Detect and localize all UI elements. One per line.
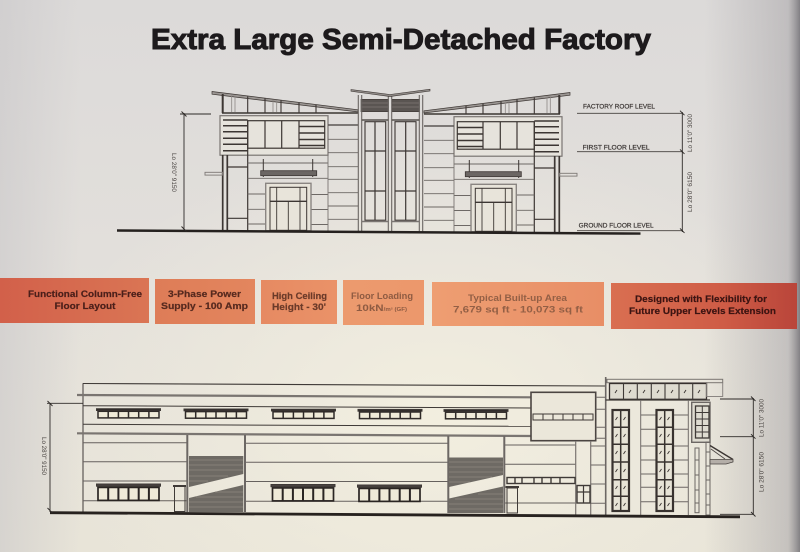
central tower of front elevation	[351, 89, 430, 232]
level labels: FACTORY ROOF LEVEL	[583, 104, 655, 110]
small doors	[173, 486, 519, 513]
feature bar: built-up area: 7,679 sq ft - 10,073 sq ft	[453, 304, 584, 316]
feature bar: power supply: Supply - 100 Amp	[161, 301, 248, 312]
feature bar: column-free layout: Functional Column-Free	[28, 289, 142, 300]
right dimension line	[680, 111, 684, 233]
lower window row	[96, 484, 422, 501]
level labels: GROUND FLOOR LEVEL	[579, 222, 654, 230]
front dimension labels: Lo 11'0" 3000	[688, 113, 694, 152]
service column and strip window	[507, 441, 606, 515]
feature bar: built-up area	[432, 282, 604, 326]
side dimension labels	[40, 398, 766, 492]
feature bar: floor loading	[343, 280, 424, 325]
roller door two	[448, 436, 504, 513]
side left dimension line	[47, 401, 83, 513]
ground line	[50, 513, 740, 517]
front dimension labels	[170, 113, 694, 212]
title: Extra Large Semi-Detached Factory	[151, 24, 651, 56]
ground line	[117, 230, 640, 234]
right wing of front elevation	[424, 92, 577, 232]
feature bar: flexibility: Future Upper Levels Extension	[629, 306, 776, 317]
front elevation drawing	[117, 89, 684, 234]
canopy	[710, 446, 733, 464]
feature bar: ceiling height: Height - 30'	[272, 302, 326, 313]
signage box	[531, 392, 606, 441]
feature bar: column-free layout: Floor Layout	[54, 301, 116, 312]
level labels	[579, 104, 655, 230]
side elevation drawing	[47, 377, 756, 517]
feature bar: power supply: 3-Phase Power	[168, 289, 241, 300]
feature bar: built-up area: Typical Built-up Area	[468, 293, 568, 304]
feature bar: flexibility	[611, 283, 797, 329]
left wing of front elevation	[205, 92, 358, 231]
feature bar: floor loading: 10kN /m² (GF)	[356, 303, 407, 314]
front dimension labels: Lo 28'0" 9150	[170, 153, 176, 193]
left dimension line	[180, 112, 211, 232]
feature bar: power supply	[155, 279, 255, 324]
level labels: FIRST FLOOR LEVEL	[583, 144, 650, 152]
feature bar: ceiling height	[261, 280, 337, 324]
upper window row	[96, 409, 508, 419]
feature bar: floor loading: Floor Loading	[351, 291, 413, 302]
front dimension labels: Lo 28'0" 6150	[688, 171, 694, 212]
feature bar: flexibility: Designed with Flexibility for	[635, 294, 767, 305]
side dimension labels: Lo 28'0" 6150	[760, 451, 766, 492]
side dimension labels: Lo 11'0" 3000	[760, 398, 766, 437]
level lines	[577, 113, 683, 231]
main hall lines	[77, 383, 605, 512]
side right dimension line	[720, 396, 756, 516]
feature bar: column-free layout	[0, 278, 149, 323]
feature bar: ceiling height: High Ceiling	[272, 291, 327, 302]
office block	[606, 377, 723, 515]
side dimension labels: Lo 28'0" 9150	[40, 437, 46, 476]
roller door one	[187, 435, 245, 512]
